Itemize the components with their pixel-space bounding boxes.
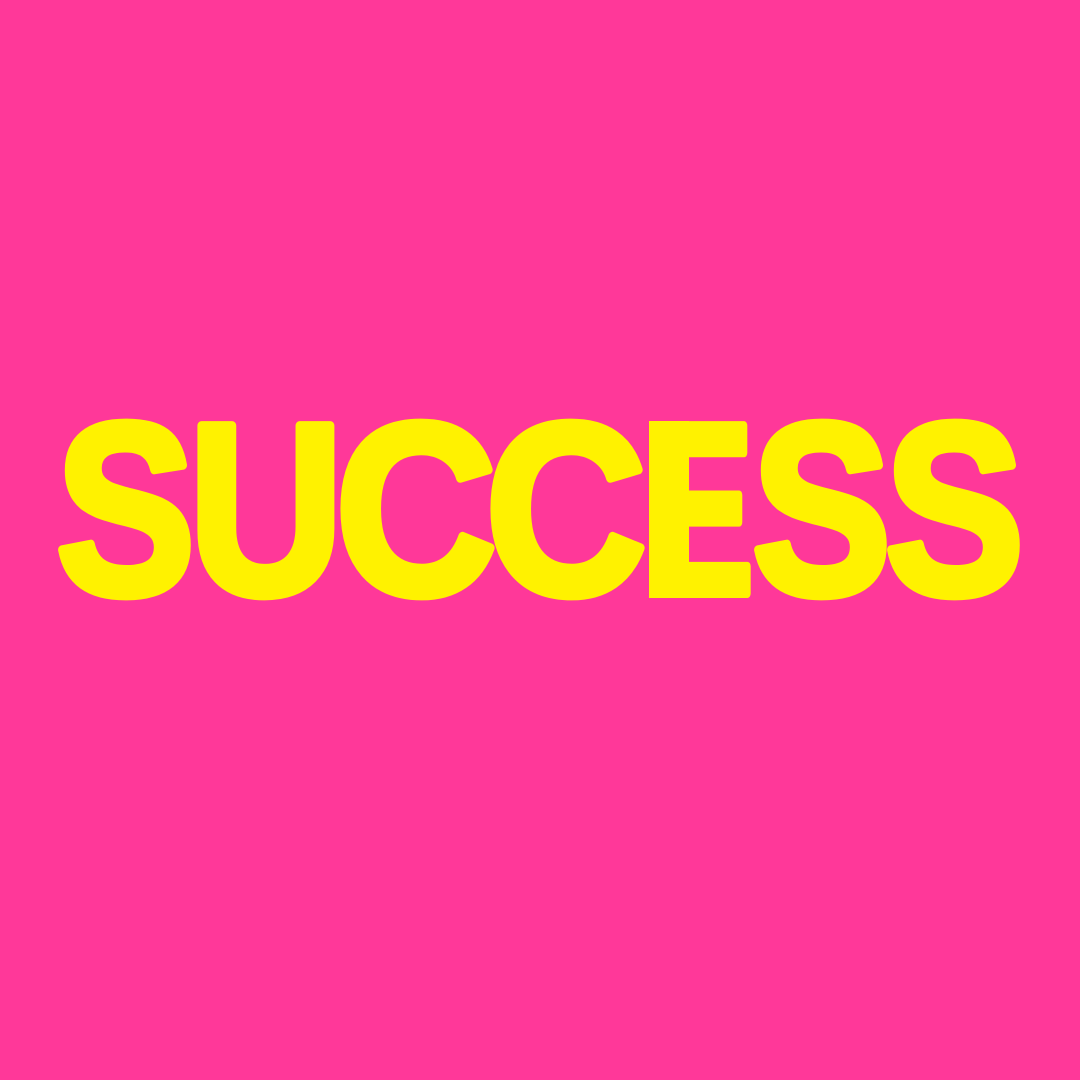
title: SUCCESS: U: [188, 373, 344, 646]
title: SUCCESS: S: [752, 374, 891, 646]
title: SUCCESS: S: [56, 374, 195, 646]
title: SUCCESS: S: [885, 374, 1024, 646]
title: SUCCESS: E: [642, 374, 754, 646]
title: SUCCESS: C: [485, 372, 647, 646]
title: SUCCESS: [56, 372, 1024, 646]
title: SUCCESS: C: [335, 372, 497, 646]
